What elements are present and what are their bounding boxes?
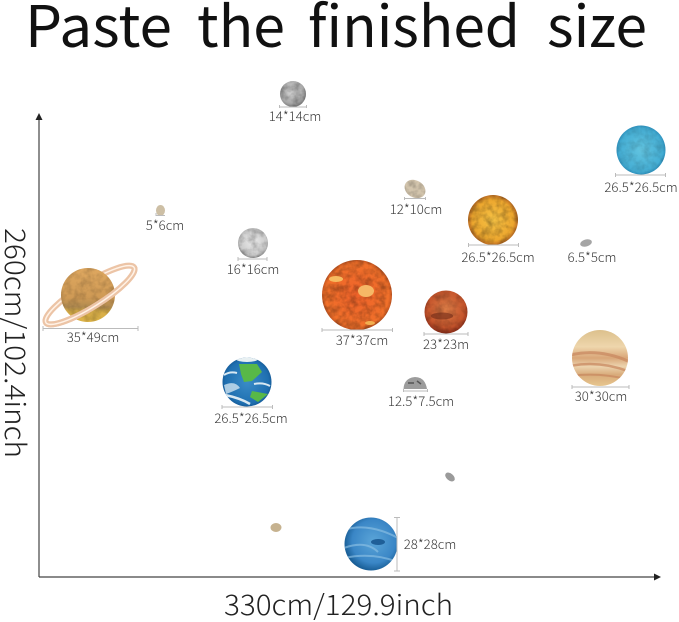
planet: Mars: 23*23m — [423, 334, 469, 353]
planet: Sun — [322, 260, 392, 349]
planet: Neptune — [344, 518, 456, 571]
planet: Sun: 37*37cm — [336, 330, 388, 349]
planet: cyan Uranus — [604, 126, 678, 196]
small brown asteroid — [270, 523, 282, 532]
planet: Mars — [423, 290, 469, 353]
planet: grey moon 14x14: 14*14cm — [269, 106, 321, 125]
asteroid 12.5x7.5 — [388, 377, 454, 410]
asteroid 5x6: 5*6cm — [146, 215, 184, 234]
planet: Venus — [461, 195, 535, 266]
vertical axis arrow — [36, 113, 42, 577]
asteroid 6.5x5: 6.5*5cm — [568, 247, 616, 266]
planet: Saturn with rings — [40, 257, 140, 346]
planet: Saturn with rings: 35*49cm — [67, 327, 119, 346]
planet: moon 16x16 — [227, 228, 279, 278]
planet: Earth: 26.5*26.5cm — [214, 408, 288, 427]
planet: Earth — [214, 356, 288, 427]
asteroid 12.5x7.5: 12.5*7.5cm — [388, 391, 454, 410]
asteroid 5x6 — [146, 205, 184, 234]
planet: cyan Uranus: 26.5*26.5cm — [604, 177, 678, 196]
small grey asteroid — [444, 471, 456, 483]
asteroid 12x10: 12*10cm — [390, 199, 442, 218]
planet: Venus: 26.5*26.5cm — [461, 247, 535, 266]
planet: grey moon 14x14 — [269, 81, 321, 125]
asteroid 6.5x5 — [568, 238, 616, 266]
planet: Jupiter: 30*30cm — [575, 386, 627, 405]
horizontal axis arrow — [39, 574, 661, 580]
planet: Neptune: 28*28cm — [404, 534, 456, 553]
planet: Jupiter — [570, 330, 630, 405]
title — [25, 0, 647, 64]
planet: moon 16x16: 16*16cm — [227, 259, 279, 278]
asteroid 12x10 — [390, 176, 442, 218]
